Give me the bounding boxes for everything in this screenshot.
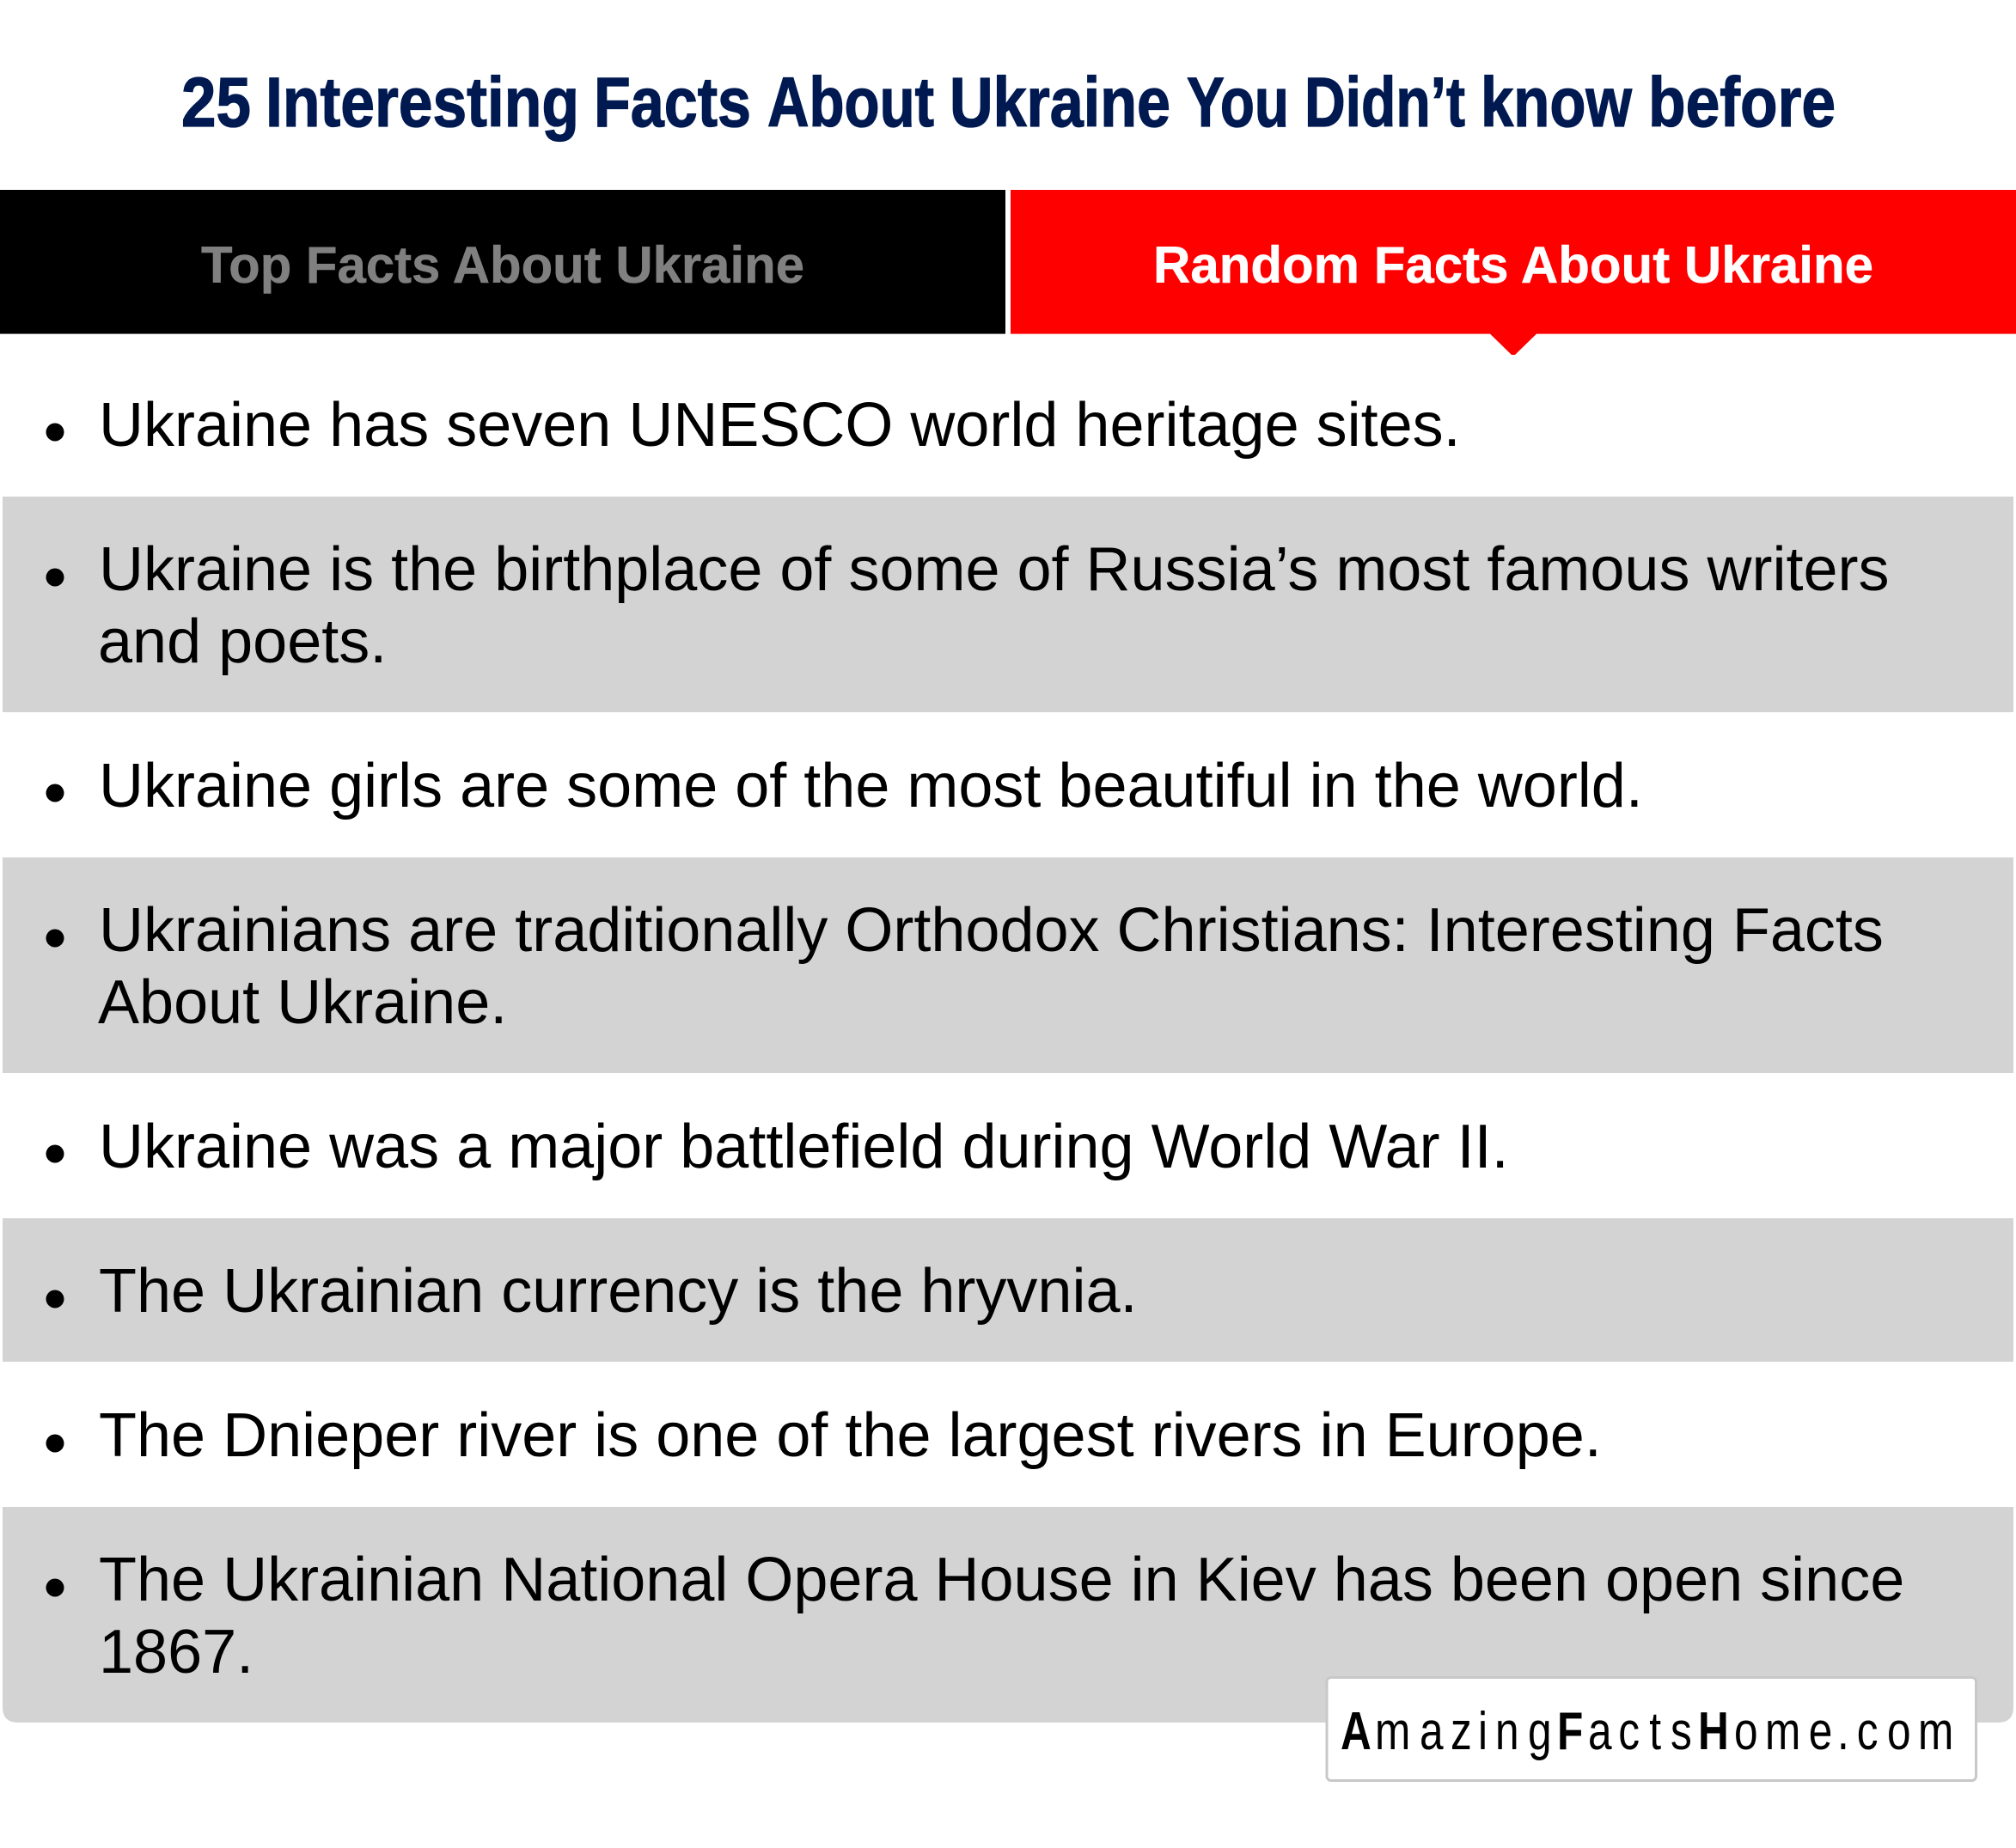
- title: Ukraine: [950, 64, 1170, 142]
- fact 2: [3, 497, 2013, 712]
- fact 6: [3, 1218, 2013, 1362]
- tab: top facts: [0, 190, 1005, 334]
- fact 8: 1867.: [99, 1618, 254, 1686]
- tab: random facts (active): [1011, 190, 2016, 355]
- title: Didn’t: [1304, 64, 1465, 142]
- title: [181, 64, 1836, 142]
- fact 3: Ukraine girls are some of the most beautiful in the world.: [99, 752, 1643, 820]
- title: You: [1187, 64, 1289, 142]
- fact 5: Ukraine was a major battlefield during World War II.: [99, 1113, 1509, 1181]
- title: Facts: [594, 64, 751, 142]
- tab: top facts: Top Facts About Ukraine: [201, 236, 804, 294]
- fact 7: The Dnieper river is one of the largest rivers in Europe.: [99, 1401, 1602, 1470]
- title: before: [1648, 64, 1836, 142]
- fact 2: and poets.: [98, 607, 387, 676]
- fact 2: Ukraine is the birthplace of some of Russia’s most famous writers: [99, 535, 1889, 604]
- fact 4: About Ukraine.: [98, 968, 507, 1037]
- fact 4: Ukrainians are traditionally Orthodox Christians: Interesting Facts: [99, 896, 1884, 965]
- fact 8: [3, 1507, 2013, 1723]
- fact 8: The Ukrainian National Opera House in Kiev has been open since: [99, 1546, 1904, 1614]
- title: Interesting: [266, 64, 579, 142]
- title: About: [767, 64, 934, 142]
- tab: random facts (active): Random Facts About Ukraine: [1153, 236, 1873, 294]
- fact 4: [3, 857, 2013, 1073]
- title: know: [1481, 64, 1632, 142]
- title: 25: [181, 64, 251, 142]
- fact 6: The Ukrainian currency is the hryvnia.: [99, 1257, 1138, 1326]
- logo badge: AmazingFactsHome.com: [1341, 1701, 1953, 1760]
- logo badge: [1327, 1677, 1976, 1780]
- fact 1: Ukraine has seven UNESCO world heritage sites.: [99, 391, 1461, 460]
